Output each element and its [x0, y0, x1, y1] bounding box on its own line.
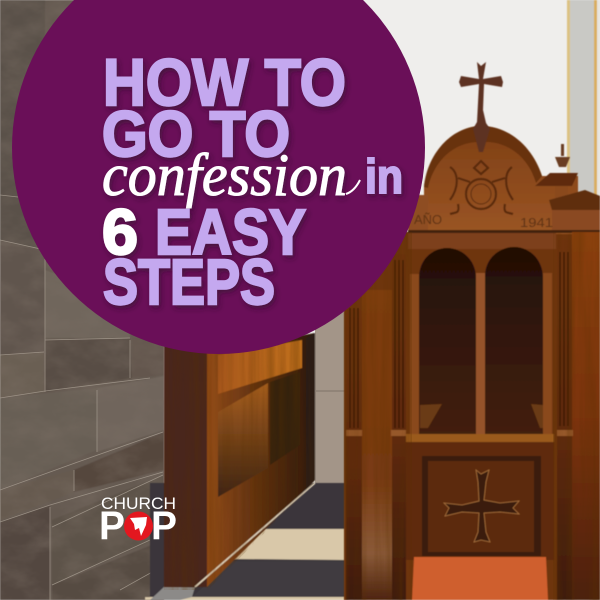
columns [410, 274, 419, 436]
panel: checkered floor [145, 483, 345, 600]
crown ledge [408, 230, 600, 233]
ledge [406, 434, 554, 442]
logo badge: red circle with white mark [124, 512, 153, 540]
logo letter: second P: P [151, 504, 177, 548]
logo word: CHURCH: CHURCH [101, 495, 176, 513]
icon: top wooden cross [459, 62, 503, 152]
confessional body [344, 232, 600, 600]
side boards [362, 290, 392, 600]
title line: GO TO: GO TO [102, 98, 290, 170]
title [102, 45, 403, 318]
logo: Church Pop [99, 495, 177, 548]
armrests [420, 404, 442, 428]
pillar at top right [567, 0, 600, 200]
wood grain [344, 232, 412, 600]
right cornice [535, 173, 578, 186]
carved cross [444, 470, 519, 542]
carved monogram [450, 161, 513, 214]
title line: STEPS: STEPS [103, 246, 275, 318]
title word: EASY: EASY [155, 196, 306, 268]
arched niches [419, 248, 476, 434]
title line: HOW TO: HOW TO [103, 45, 346, 119]
inscription: AÑO [414, 212, 442, 227]
icon: finial [555, 144, 570, 167]
panel: wooden confessional: 1941 [520, 215, 553, 230]
logo letter: P: P [99, 504, 125, 548]
orange cushion [412, 557, 548, 600]
fluted pilasters [346, 235, 573, 600]
panel: purple circle [12, 0, 425, 354]
title word: in: in [365, 151, 403, 204]
back wall beyond the door [315, 300, 345, 500]
arched crown [424, 126, 578, 234]
panel: wooden confessional [344, 126, 600, 600]
confession tail flourish [346, 180, 360, 194]
panel: slate stone wall on the left [0, 0, 164, 600]
lower panel [406, 442, 554, 560]
title word: confession: confession [102, 142, 347, 208]
panel: open wooden door [164, 333, 315, 590]
title number: 6: 6 [102, 196, 138, 268]
